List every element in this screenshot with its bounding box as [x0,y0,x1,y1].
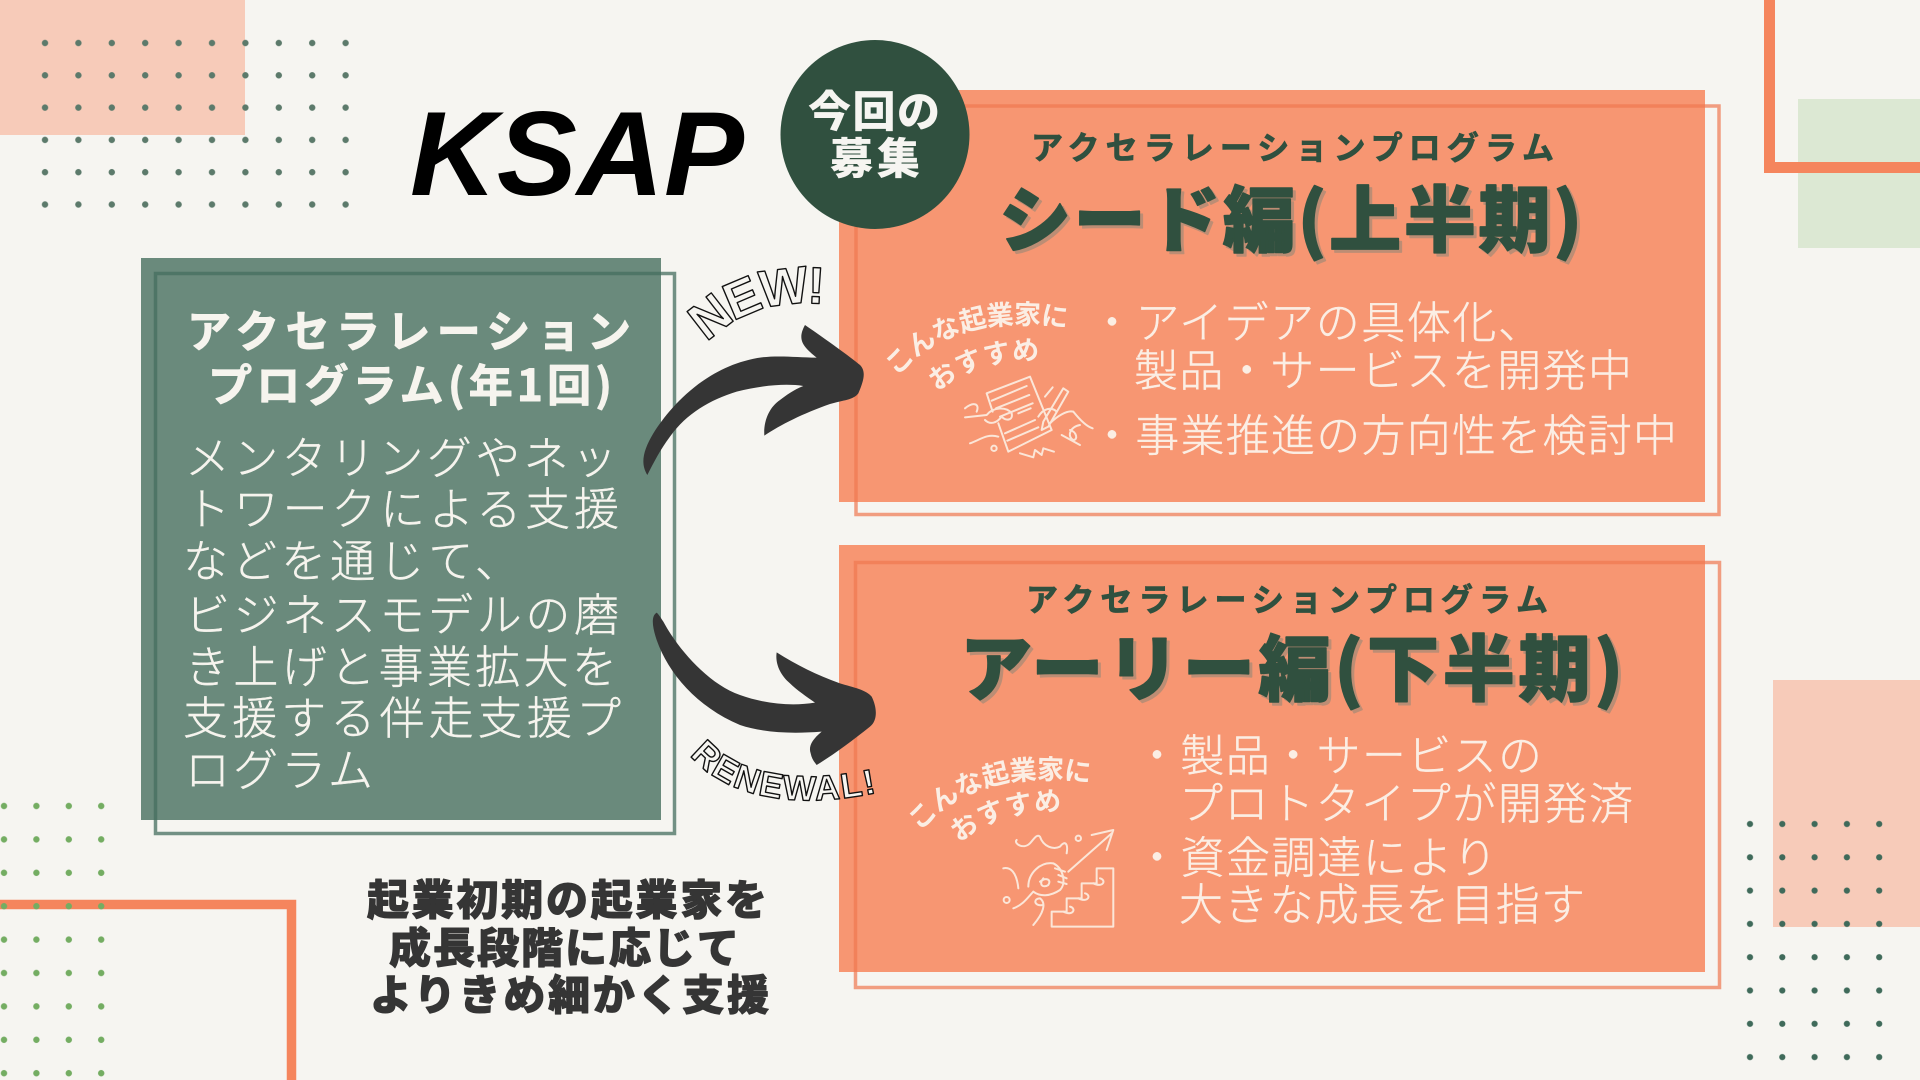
decoration: right dot grid [1734,807,1895,1074]
seed recommendation label: こんな起業家に [886,301,1066,372]
panel background [141,258,661,820]
panel heading: アクセラレーション [187,296,631,360]
seed bullet list: 製品・サービスを開発中 [1134,335,1632,399]
decoration: right peach block [1773,680,1920,927]
caption: support summary: 起業初期の起業家を [367,867,767,928]
badge circle [780,40,970,229]
panel body text: き上げと事業拡大を [185,631,617,696]
badge text: 募集 [830,125,920,187]
arrow: to seed program [643,325,864,475]
seed bullet list: ・事業推進の方向性を検討中 [1090,400,1677,464]
seed recommendation label: おすすめ [929,338,1038,389]
early bullet list: 大きな成長を目指す [1179,869,1585,933]
panel body text: ビジネスモデルの磨 [185,579,619,644]
early recommendation label: おすすめ [951,789,1060,840]
early panel subtitle: アクセラレーションプログラム [1026,575,1548,621]
panel heading [187,296,631,414]
early recommendation label: こんな起業家に [910,756,1090,827]
icon: fist and rising stairs [1003,830,1113,927]
decoration: bottom-left dot grid [0,789,117,1080]
icon: hand writing on document [965,377,1093,457]
panel: accelerator program overview [141,258,674,834]
decoration: top-left dot grid [28,27,362,221]
panel: early program [839,545,1722,990]
decoration: top-left peach block [0,0,245,135]
seed panel subtitle: アクセラレーションプログラム [1031,123,1554,169]
early bullet list: ・資金調達により [1135,822,1497,886]
early bullet list: プロトタイプが開発済 [1179,768,1633,832]
seed panel outline [856,106,1719,514]
seed bullet list: ・アイデアの具体化、 [1090,287,1542,351]
badge text [808,78,940,187]
panel body text [183,422,621,799]
early panel background [839,545,1705,972]
label: RENEWAL!: RENEWAL! [690,738,874,802]
panel body text: メンタリングやネッ [185,422,617,487]
seed panel background [839,90,1705,502]
panel body text: 支援する伴走支援プ [183,682,621,747]
early panel outline [856,562,1720,988]
panel outline [156,274,674,834]
badge: current recruitment [780,40,970,229]
badge text: 今回の [808,78,940,140]
seed bullet list [1090,287,1677,464]
early panel title: アーリー編(下半期) [960,611,1623,716]
decoration: bottom-left orange frame [0,904,292,1080]
panel body text: ログラム [185,734,373,799]
early bullet list [1135,720,1633,933]
decoration: top-right green block [1798,99,1920,248]
caption: support summary: 成長段階に応じて [389,915,739,976]
seed panel title: シード編(上半期) [999,162,1582,267]
arrow: to early program [653,613,876,765]
panel: seed program [839,90,1721,516]
caption: support summary [367,867,769,1023]
early bullet list: ・製品・サービスの [1135,720,1542,784]
panel body text: トワークによる支援 [185,473,619,538]
label: NEW!: NEW! [686,266,822,341]
title: KSAP: KSAP [410,87,745,221]
caption: support summary: よりきめ細かく支援 [370,962,769,1023]
panel heading: プログラム(年1回) [208,350,612,414]
decoration: top-right orange frame [1770,0,1920,168]
panel body text: などを通じて、 [183,525,520,590]
